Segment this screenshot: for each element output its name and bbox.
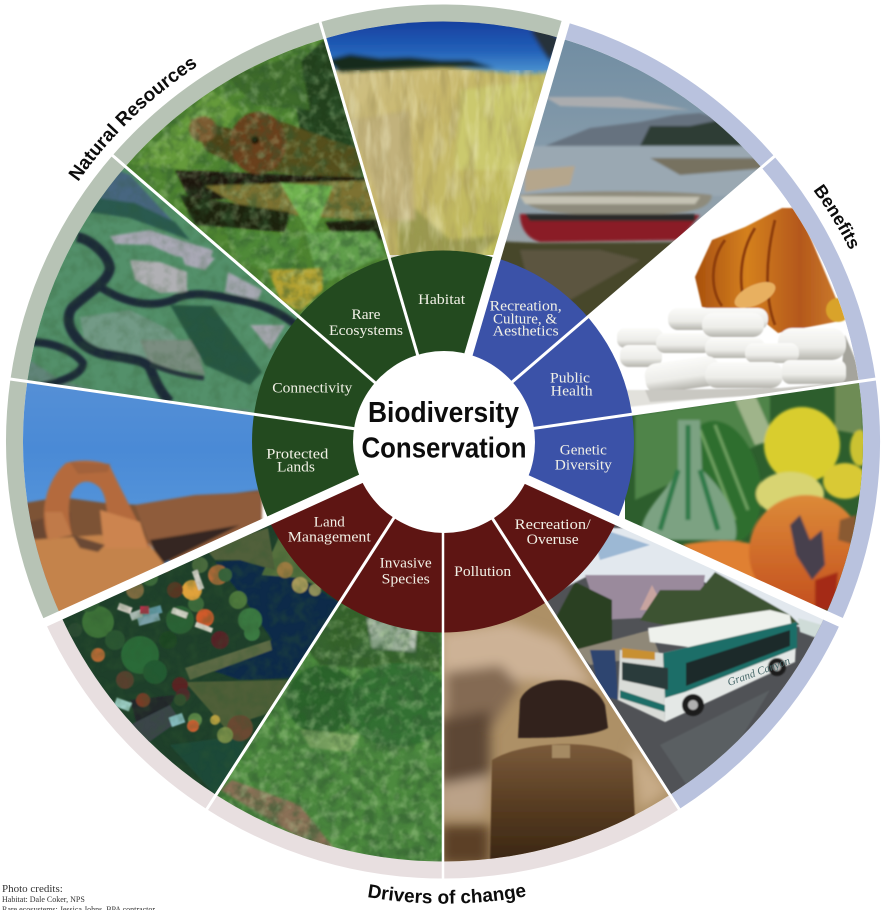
title: Biodiversity Conservation — [362, 397, 526, 464]
label: Rare Ecosystems: Rare — [352, 307, 381, 323]
label: Protected Lands: Lands — [277, 460, 315, 476]
label: Rare Ecosystems: Ecosystems — [329, 323, 403, 339]
label: Habitat: Habitat — [418, 292, 466, 308]
label: Recreation / Overuse: Overuse — [527, 532, 579, 548]
label: Protected Lands: Protected — [266, 446, 329, 462]
ring: drivers of change band — [53, 619, 675, 870]
label: Rare Ecosystems — [329, 307, 403, 339]
label: Connectivity: Connectivity — [272, 380, 353, 396]
photo credits: Habitat: Dale Coker, NPS — [2, 895, 85, 904]
label: Public Health: Public — [550, 371, 590, 387]
ring: benefits band — [564, 30, 872, 802]
label: Genetic Diversity — [555, 442, 612, 473]
photo: land management aerial — [62, 524, 338, 794]
inner wheel: natural resources segment — [252, 251, 497, 521]
inner wheel: benefits segment — [443, 258, 634, 521]
photo: habitat meadow — [326, 22, 557, 258]
title: Biodiversity Conservation: Biodiversity — [368, 397, 519, 429]
label: Public Health — [550, 371, 593, 400]
label: Invasive Species: Species — [382, 571, 430, 587]
label: Protected Lands — [266, 446, 329, 476]
ring: natural resources band — [14, 13, 564, 619]
bus lettering: Grand Canyon — [726, 655, 792, 689]
centre circle — [353, 351, 535, 533]
photo: public health pills — [616, 169, 858, 407]
photo: invasive species kudzu — [217, 603, 442, 862]
label: Public Health: Health — [551, 384, 593, 400]
photo credits: Photo credits: — [2, 883, 63, 895]
photo credits — [2, 883, 155, 910]
label: Recreation, Culture, & Aesthetics: Recreation, — [490, 299, 562, 315]
label: Land Management: Management — [288, 530, 372, 546]
inner wheel: drivers segment — [269, 442, 617, 632]
photo: genetic diversity produce — [625, 375, 870, 620]
label: Land Management — [288, 515, 372, 546]
ring heading: Drivers of change: Drivers of change — [368, 884, 526, 904]
label: Land Management: Land — [314, 515, 345, 531]
ring heading: Natural Resources: Natural Resources — [68, 59, 196, 181]
label: Invasive Species — [380, 556, 432, 587]
photo: protected lands arch — [20, 375, 262, 625]
photo: recreation overuse bus — [548, 524, 824, 794]
photo: connectivity marsh river — [28, 168, 298, 413]
photo: pollution smokestack — [444, 603, 669, 862]
title: Biodiversity Conservation: Conservation — [362, 432, 526, 464]
label: Pollution: Pollution — [454, 564, 512, 580]
label: Genetic Diversity: Diversity — [555, 457, 612, 473]
label: Invasive Species: Invasive — [380, 556, 432, 572]
photo: rare ecosystems forest — [126, 39, 388, 316]
label: Recreation, Culture, & Aesthetics — [490, 299, 562, 340]
label: Recreation / Overuse: Recreation/ — [515, 517, 592, 533]
label: Recreation / Overuse — [515, 517, 592, 548]
label: Recreation, Culture, & Aesthetics: Aesthetics — [493, 324, 559, 340]
ring heading: Benefits: Benefits — [814, 184, 858, 249]
label: Genetic Diversity: Genetic — [560, 442, 607, 458]
label: Recreation, Culture, & Aesthetics: Culture, & — [493, 311, 557, 327]
photo: recreation lake canoes — [500, 40, 760, 316]
